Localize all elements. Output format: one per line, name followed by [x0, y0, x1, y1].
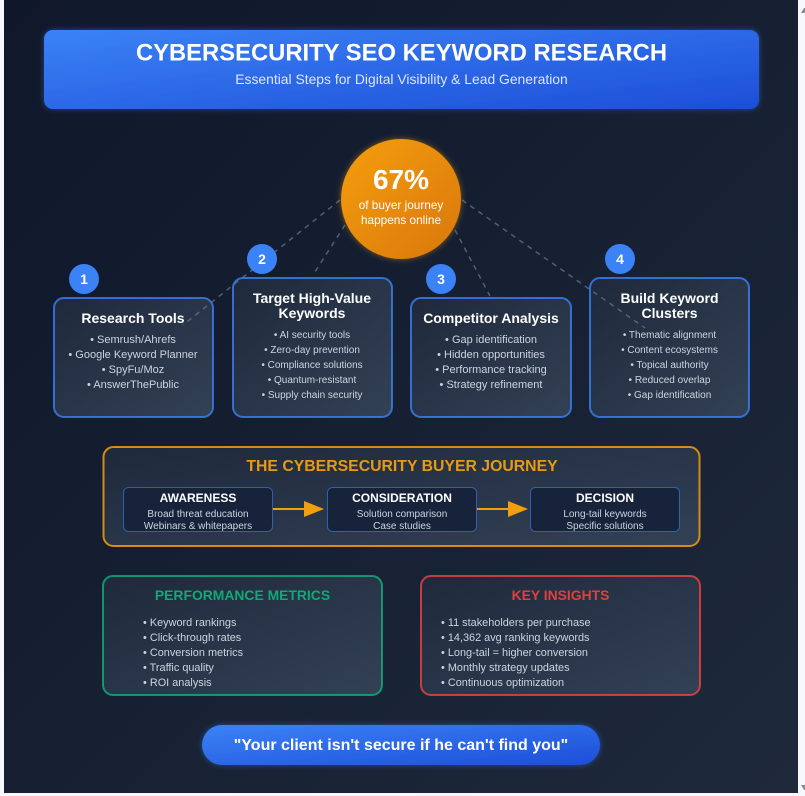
dashed connector lines [183, 200, 645, 328]
list: • SpyFu/Moz [102, 364, 164, 376]
stage: consideration [328, 488, 476, 532]
header banner [44, 30, 759, 109]
list: • Hidden opportunities [437, 349, 545, 361]
step badge 2: 2 [258, 251, 266, 267]
list: • Reduced overlap [629, 375, 711, 386]
list: • Continuous optimization [441, 677, 564, 689]
statistic caption: of buyer journey [359, 198, 443, 212]
step badge 4: 4 [616, 251, 624, 267]
heading: Keywords [279, 305, 346, 321]
list: • ROI analysis [143, 677, 212, 689]
scrollbar arrows [801, 8, 805, 790]
step badge 3 [426, 264, 456, 294]
step badge 2 [247, 244, 277, 274]
stage: awareness: Broad threat education [147, 509, 249, 520]
step badge 1 [69, 264, 99, 294]
panel: keyword clusters [590, 278, 749, 417]
arrow: consideration to decision [477, 501, 528, 517]
list: • Monthly strategy updates [441, 662, 570, 674]
list: • AI security tools [274, 330, 350, 341]
list: • Compliance solutions [261, 360, 363, 371]
stage: consideration: Case studies [373, 521, 431, 532]
list: • Performance tracking [435, 364, 547, 376]
quote callout: "Your client isn't secure if he can't find you" [234, 737, 568, 754]
list: • 11 stakeholders per purchase [441, 617, 591, 629]
central statistic circle [341, 139, 461, 259]
statistic caption: happens online [361, 213, 441, 227]
list: • Gap identification [628, 390, 711, 401]
stage: consideration: Solution comparison [357, 509, 447, 520]
heading: KEY INSIGHTS [512, 587, 609, 603]
stage: awareness: Webinars & whitepapers [144, 521, 252, 532]
heading: PERFORMANCE METRICS [155, 587, 330, 603]
list: • Click-through rates [143, 632, 242, 644]
stage: decision: Long-tail keywords [563, 509, 647, 520]
list: • Gap identification [445, 334, 537, 346]
list: • Traffic quality [143, 662, 214, 674]
list: • Conversion metrics [143, 647, 244, 659]
stage: decision: DECISION [576, 491, 634, 505]
list: • Content ecosystems [621, 345, 718, 356]
panel: research tools [54, 298, 213, 417]
list: • Semrush/Ahrefs [90, 334, 176, 346]
panel: key insights [421, 576, 700, 695]
list: • Zero-day prevention [264, 345, 360, 356]
list: • Quantum-resistant [268, 375, 356, 386]
panel: target keywords [233, 278, 392, 417]
list: • 14,362 avg ranking keywords [441, 632, 590, 644]
list: • Keyword rankings [143, 617, 236, 629]
heading: Build Keyword [620, 290, 719, 306]
heading: Target High-Value [253, 290, 371, 306]
list: • Topical authority [630, 360, 709, 371]
arrow: awareness to consideration [273, 501, 324, 517]
heading: Competitor Analysis [423, 310, 559, 326]
step badge 1: 1 [80, 271, 88, 287]
panel: performance metrics [103, 576, 382, 695]
statistic value: 67% [373, 164, 429, 195]
subtitle: Essential Steps for Digital Visibility & Lead Generation [235, 71, 568, 87]
stage: consideration: CONSIDERATION [352, 491, 452, 505]
stage: decision: Specific solutions [566, 521, 644, 532]
stage: decision [530, 488, 680, 532]
list: • AnswerThePublic [87, 379, 179, 391]
list: • Thematic alignment [623, 330, 716, 341]
stage: awareness [124, 488, 272, 532]
list: • Strategy refinement [440, 379, 542, 391]
panel: competitor analysis [411, 298, 571, 417]
title: CYBERSECURITY SEO KEYWORD RESEARCH [136, 40, 667, 66]
panel: buyer journey [104, 447, 700, 546]
step badge 3: 3 [437, 271, 445, 287]
list: • Long-tail = higher conversion [441, 647, 588, 659]
list: • Google Keyword Planner [68, 349, 198, 361]
quote callout [202, 725, 600, 765]
step badge 4 [605, 244, 635, 274]
heading: THE CYBERSECURITY BUYER JOURNEY [246, 458, 558, 475]
heading: Research Tools [81, 310, 185, 326]
list: • Supply chain security [262, 390, 362, 401]
heading: Clusters [641, 305, 698, 321]
stage: awareness: AWARENESS [160, 491, 236, 505]
